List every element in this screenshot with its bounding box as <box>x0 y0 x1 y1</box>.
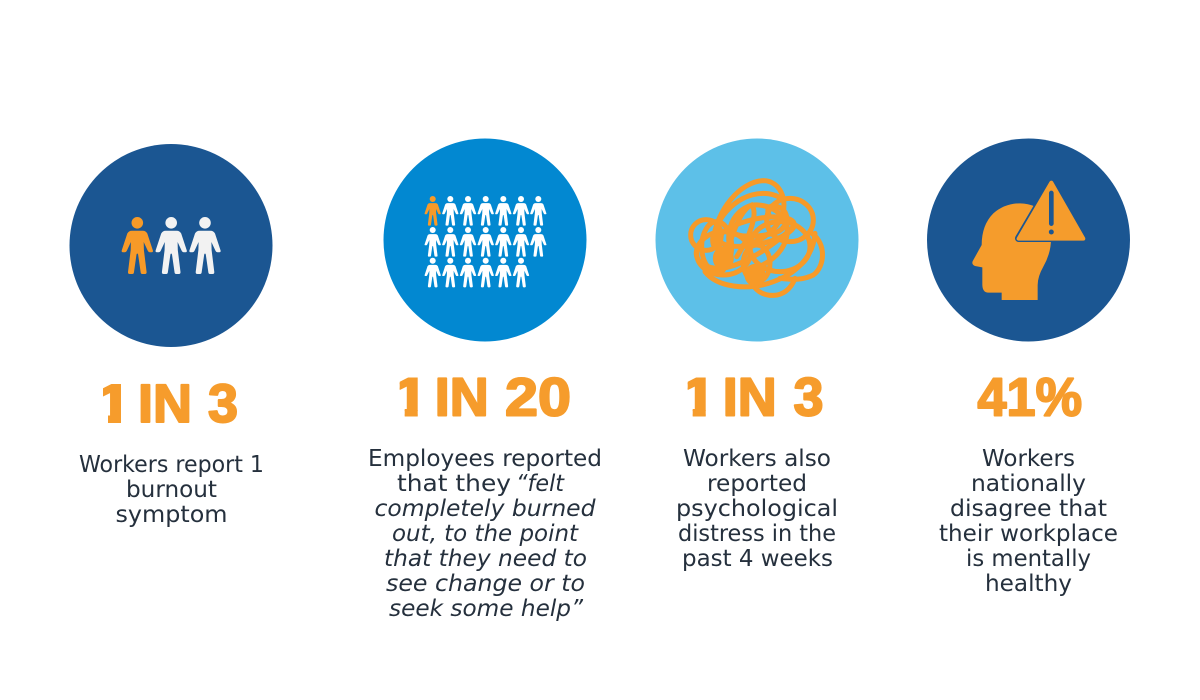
description text <box>79 452 264 528</box>
panel: 1 in 3 psychological distress <box>656 138 858 572</box>
description text with italic quote: Employees reported <box>368 446 602 472</box>
stat heading: 1 IN 3: 1 <box>95 374 133 434</box>
stat heading: 1 IN 3: 1 <box>680 368 718 428</box>
stat heading: 1 IN 3 <box>688 376 822 417</box>
description text: their workplace <box>939 521 1118 547</box>
stat heading: 1 IN 20: IN <box>435 368 489 428</box>
stat heading: 1 IN 20: 20 <box>505 368 571 428</box>
description text with italic quote: that they <box>397 471 511 497</box>
description text with italic quote: completely burned <box>374 496 596 522</box>
description text: burnout <box>126 477 217 503</box>
description text: past 4 weeks <box>682 546 833 572</box>
description text with italic quote: seek some help” <box>389 596 584 622</box>
description text with italic quote: out, to the point <box>392 521 579 547</box>
description text: disagree that <box>950 496 1107 522</box>
description text: distress in the <box>678 521 836 547</box>
stat heading: 1 IN 3: IN <box>723 368 777 428</box>
panel: 1 in 3 burnout symptom <box>70 144 272 528</box>
stat heading: 41%: 41% <box>978 368 1082 428</box>
description text: psychological <box>676 496 838 522</box>
icon: three people, one highlighted <box>122 217 221 274</box>
description text <box>676 446 838 572</box>
description text: Workers report 1 <box>79 452 264 478</box>
description text: is mentally <box>966 546 1091 572</box>
circle badge: light blue <box>656 138 858 342</box>
stat heading: 1 IN 3: 3 <box>208 374 238 434</box>
description text with italic quote: that they need to <box>384 546 587 572</box>
circle badge: navy <box>70 144 272 347</box>
icon: head with warning triangle <box>972 183 1083 300</box>
stat heading: 1 IN 3: IN <box>138 374 192 434</box>
description text: healthy <box>985 571 1072 597</box>
stat heading: 1 IN 20 <box>400 376 570 417</box>
description text: nationally <box>971 471 1086 497</box>
circle badge: blue <box>384 138 586 342</box>
stat heading: 1 IN 3: 3 <box>794 368 824 428</box>
panel: 1 in 20 employees <box>368 138 602 622</box>
icon: twenty people, one highlighted <box>425 196 546 287</box>
description text <box>939 446 1118 597</box>
stat heading: 1 IN 3 <box>103 383 237 424</box>
description text: reported <box>707 471 807 497</box>
description text with italic quote: see change or to <box>386 571 585 597</box>
description text: Workers also <box>683 446 831 472</box>
description text: symptom <box>116 502 228 528</box>
circle badge: navy <box>927 138 1130 342</box>
description text with italic quote: “felt <box>516 471 565 497</box>
description text with italic quote <box>368 446 602 622</box>
icon: tangled scribble <box>691 181 822 295</box>
stat heading: 1 IN 20: 1 <box>392 368 430 428</box>
panel: 41% workplace not mentally healthy <box>927 138 1130 597</box>
description text: Workers <box>982 446 1075 472</box>
